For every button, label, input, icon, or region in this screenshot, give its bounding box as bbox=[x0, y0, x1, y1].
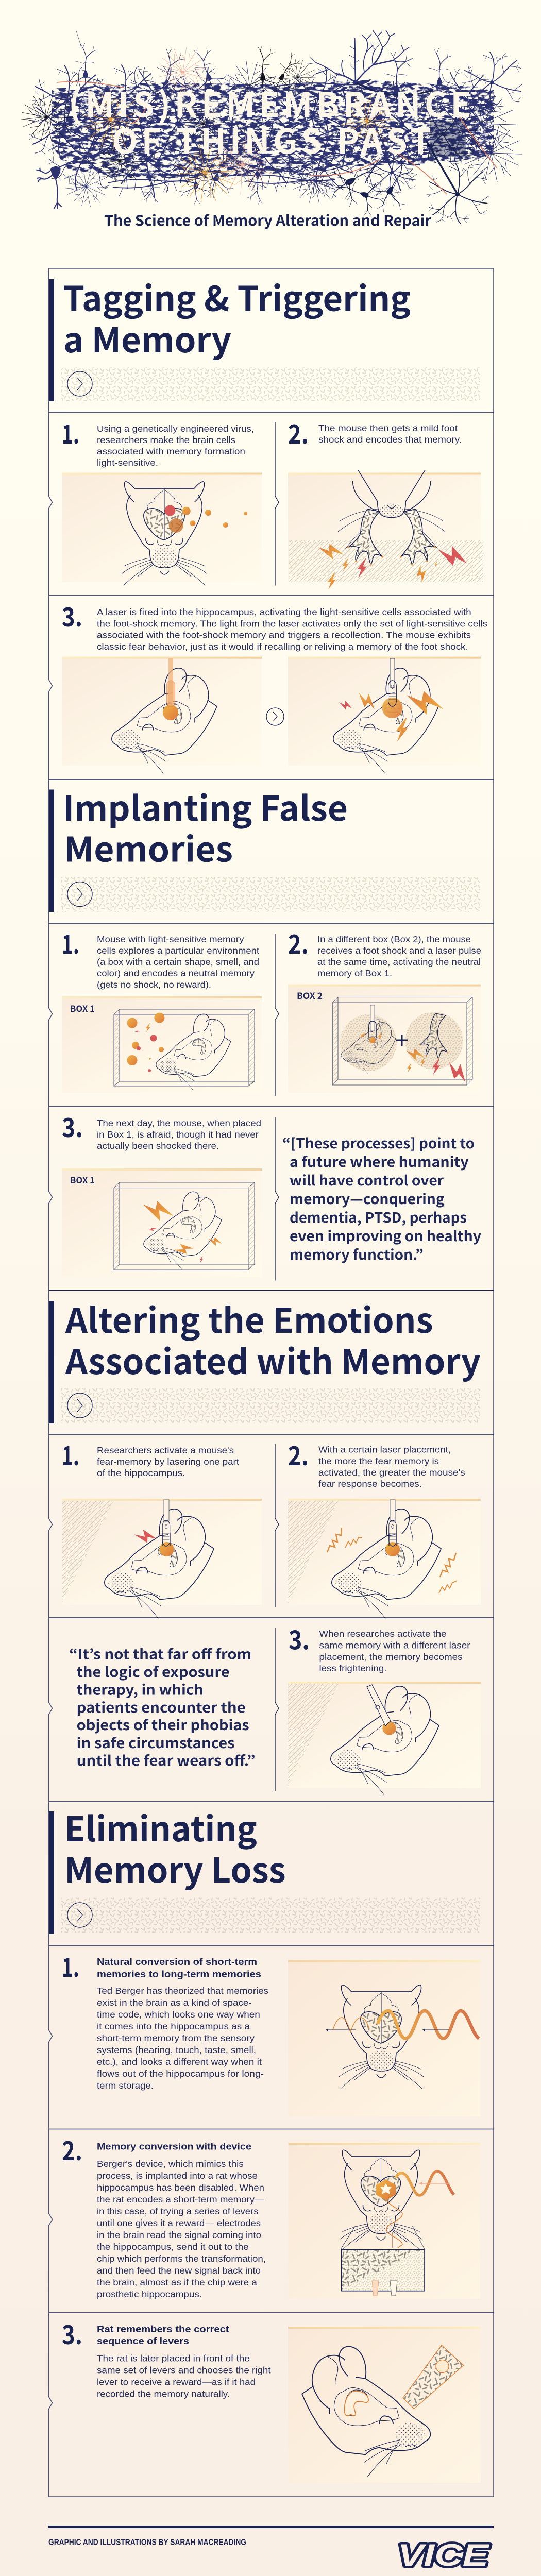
number: 3. bbox=[62, 1107, 83, 1145]
illustration: mouse feet shocked bbox=[288, 470, 483, 589]
box label: BOX 1 bbox=[70, 1173, 95, 1186]
section bar bbox=[49, 1301, 54, 1423]
illustration: rat with memory signal bbox=[288, 2327, 481, 2483]
patterned band with arrow bbox=[61, 367, 480, 401]
step heading bbox=[97, 2324, 229, 2346]
section heading: Memory Loss bbox=[64, 1843, 286, 1893]
step 3 bbox=[62, 2314, 481, 2483]
step text bbox=[97, 2353, 271, 2399]
patterned band with arrow bbox=[61, 877, 480, 912]
section heading: Altering the Emotions bbox=[65, 1294, 433, 1343]
pull quote: memory—conquering bbox=[290, 1188, 445, 1208]
section: implanting false memories bbox=[49, 782, 482, 1277]
step text: With a certain laser placement, bbox=[318, 1445, 451, 1455]
section bar bbox=[49, 1811, 54, 1934]
illustration: mouse head with tagged cells bbox=[62, 473, 262, 585]
pull quote: “It’s not that far off from bbox=[69, 1643, 251, 1664]
step heading: Memory conversion with device bbox=[97, 2141, 251, 2152]
illustration: box 1 fear bbox=[62, 1168, 262, 1277]
pull quote: memory function.” bbox=[290, 1244, 424, 1264]
step text: light-sensitive. bbox=[97, 457, 158, 468]
number: 3. bbox=[62, 596, 82, 634]
step text bbox=[318, 423, 462, 445]
step 1 bbox=[62, 413, 262, 585]
illustration: mouse fear response bbox=[288, 657, 481, 773]
step 2 bbox=[288, 923, 481, 1093]
number: 2. bbox=[62, 2130, 82, 2168]
step 3 bbox=[62, 596, 487, 773]
step text: A laser is fired into the hippocampus, activating the light-sensitive cells associated with bbox=[97, 607, 471, 617]
pull quote: “[These processes] point to bbox=[282, 1132, 475, 1153]
pull quote: a future where humanity bbox=[290, 1151, 469, 1171]
step heading: memories to long-term memories bbox=[97, 1969, 261, 1979]
box label: BOX 1 bbox=[70, 1002, 95, 1014]
outer frame bbox=[48, 268, 494, 2497]
pull quote bbox=[282, 1132, 482, 1264]
step text: short-term memory from the sensory bbox=[97, 2033, 255, 2043]
illustration: laser at different placement bbox=[288, 1682, 481, 1794]
step text: color) and encodes a neutral memory bbox=[97, 968, 255, 978]
step text: it comes into the hippocampus as a bbox=[97, 2021, 250, 2031]
step 1 bbox=[62, 1946, 481, 2116]
step 1 bbox=[62, 923, 262, 1093]
step text: cells explores a particular environment bbox=[97, 945, 259, 956]
number: 1. bbox=[62, 923, 79, 961]
step 2 bbox=[62, 2130, 480, 2299]
subtitle: The Science of Memory Alteration and Repair bbox=[104, 210, 432, 230]
title bbox=[69, 78, 471, 164]
number: 2. bbox=[288, 923, 309, 961]
box label: BOX 2 bbox=[297, 989, 323, 1002]
number: 2. bbox=[288, 413, 309, 451]
step text: prosthetic hippocampus. bbox=[97, 2289, 202, 2299]
box with mouse and smell cues bbox=[114, 1009, 255, 1090]
illustration: prosthetic hippocampus chip bbox=[289, 2143, 480, 2299]
number: 1. bbox=[62, 1435, 79, 1473]
step text: in Box 1, is afraid, though it had never bbox=[97, 1129, 259, 1140]
number: 3. bbox=[62, 2314, 82, 2352]
section heading: Tagging & Triggering bbox=[63, 272, 411, 321]
step text: of the hippocampus. bbox=[97, 1468, 185, 1478]
illustration: greater fear response bbox=[288, 1499, 481, 1618]
step heading: Natural conversion of short-term bbox=[97, 1956, 257, 1967]
step text bbox=[97, 607, 487, 652]
step text: Berger's device, which mimics this bbox=[97, 2159, 244, 2169]
step text: In a different box (Box 2), the mouse bbox=[317, 934, 471, 944]
step text: process, is implanted into a rat whose bbox=[97, 2171, 258, 2181]
illustration: laser activates memory bbox=[62, 657, 262, 773]
step text: less frightening. bbox=[319, 1663, 386, 1673]
pull quote bbox=[69, 1643, 256, 1770]
step text: receives a foot shock and a laser pulse bbox=[317, 945, 481, 956]
section heading: Memories bbox=[64, 823, 233, 872]
step text: the foot-shock memory. The light from the laser activates only the set of light-sensitive cells bbox=[97, 618, 487, 629]
step text: associated with memory formation bbox=[97, 446, 245, 456]
step text: (gets no shock, no reward). bbox=[97, 979, 211, 990]
step text: exist in the brain as a kind of space- bbox=[97, 1997, 252, 2008]
step text: flows out of the hippocampus for long- bbox=[97, 2069, 264, 2079]
step text: in this case, of trying a series of levers bbox=[97, 2206, 259, 2216]
step text: When researches activate the bbox=[319, 1629, 446, 1639]
step text: the rat encodes a short-term memory— bbox=[97, 2194, 264, 2205]
step text: hippocampus has been disabled. When bbox=[97, 2182, 264, 2193]
section bar bbox=[49, 789, 54, 912]
step text: and then feed the new signal back into bbox=[97, 2265, 261, 2276]
step text: the hippocampus, send it out to the bbox=[97, 2242, 249, 2252]
pull quote: the logic of exposure bbox=[77, 1661, 230, 1681]
pull quote: until the fear wears off.” bbox=[77, 1750, 256, 1770]
step 2 bbox=[288, 1435, 481, 1618]
neuron illustration bbox=[21, 31, 522, 224]
title: (MIS)REMEMBRANCE bbox=[69, 78, 471, 127]
pull quote: objects of their phobias bbox=[77, 1714, 249, 1734]
section: tagging and triggering a memory bbox=[49, 272, 487, 773]
illustration: space-time code waves bbox=[288, 1960, 481, 2116]
step text: Using a genetically engineered virus, bbox=[97, 423, 254, 434]
logo: VICE bbox=[398, 2538, 489, 2572]
step text bbox=[319, 1629, 470, 1673]
step text: until one gives it a reward— electrodes bbox=[97, 2218, 261, 2228]
step text: Mouse with light-sensitive memory bbox=[97, 934, 244, 944]
step text: the more the fear memory is bbox=[318, 1456, 439, 1466]
section: eliminating memory loss bbox=[49, 1802, 481, 2483]
patterned band with arrow bbox=[61, 1898, 480, 1933]
step text: Researchers activate a mouse's bbox=[97, 1445, 234, 1455]
step text: time code, which looks one way when bbox=[97, 2009, 260, 2020]
step 2 bbox=[288, 413, 483, 589]
step text: fear-memory by lasering one part bbox=[97, 1456, 239, 1467]
step text bbox=[97, 2159, 266, 2299]
step text: chip which performs the transformation, bbox=[97, 2253, 266, 2264]
section heading: a Memory bbox=[63, 313, 231, 363]
section heading: Eliminating bbox=[64, 1802, 257, 1852]
box with afraid mouse bbox=[114, 1182, 255, 1270]
section heading: Associated with Memory bbox=[65, 1335, 481, 1384]
pull quote: will have control over bbox=[290, 1170, 444, 1190]
section: altering the emotions bbox=[49, 1294, 481, 1794]
step text: etc.), and looks a different way when it bbox=[97, 2057, 262, 2067]
illustration: laser on fear memory bbox=[62, 1499, 262, 1618]
step heading: Rat remembers the correct bbox=[97, 2324, 229, 2334]
section heading: Implanting False bbox=[63, 782, 348, 831]
step text bbox=[318, 1445, 465, 1489]
section bar bbox=[49, 279, 54, 401]
step text: placement, the memory becomes bbox=[319, 1652, 463, 1662]
pull quote: therapy, in which bbox=[77, 1679, 204, 1699]
step text: (a box with a certain shape, smell, and bbox=[97, 957, 259, 967]
step text bbox=[317, 934, 481, 978]
pull quote: dementia, PTSD, perhaps bbox=[290, 1207, 467, 1227]
step text bbox=[97, 1445, 239, 1478]
step text: the brain, almost as if the chip were a bbox=[97, 2277, 257, 2287]
step text bbox=[97, 934, 259, 990]
box with laser and foot shock bbox=[333, 997, 472, 1085]
pull quote: in safe circumstances bbox=[77, 1732, 235, 1752]
pull quote: patients encounter the bbox=[77, 1697, 246, 1717]
step text: classic fear behavior, just as it would if recalling or reliving a memory of the foot shock. bbox=[97, 641, 468, 652]
step text: same memory with a different laser bbox=[319, 1640, 470, 1651]
step text: Ted Berger has theorized that memories bbox=[97, 1986, 268, 1996]
step text: The rat is later placed in front of the bbox=[97, 2353, 250, 2364]
step text: same set of levers and chooses the right bbox=[97, 2365, 271, 2376]
step text: lever to receive a reward—as if it had bbox=[97, 2377, 256, 2387]
step 3 bbox=[288, 1619, 481, 1794]
step text: researchers make the brain cells bbox=[97, 435, 235, 445]
section heading bbox=[65, 1294, 481, 1384]
step text: shock and encodes that memory. bbox=[318, 434, 462, 445]
title: OF THINGS PAST bbox=[112, 114, 431, 164]
step text: at the same time, activating the neutral bbox=[317, 957, 481, 967]
step 3 bbox=[62, 1107, 262, 1277]
number: 2. bbox=[288, 1435, 309, 1473]
pull quote: even improving on healthy bbox=[290, 1225, 482, 1245]
footer rule bbox=[48, 2526, 494, 2528]
patterned band with arrow bbox=[61, 1388, 480, 1423]
credit: GRAPHIC AND ILLUSTRATIONS BY SARAH MACREADING bbox=[48, 2538, 246, 2547]
number: 3. bbox=[289, 1619, 310, 1657]
step text bbox=[97, 423, 254, 468]
step text: memory of Box 1. bbox=[317, 968, 392, 978]
step 1 bbox=[62, 1435, 262, 1618]
number: 1. bbox=[62, 1946, 79, 1985]
step text: associated with the foot-shock memory and triggers a recollection. The mouse exhibits bbox=[97, 630, 471, 640]
step text bbox=[97, 1986, 268, 2091]
step text bbox=[97, 1118, 261, 1151]
illustration: box 1 bbox=[62, 996, 262, 1093]
step heading: sequence of levers bbox=[97, 2335, 189, 2346]
section heading bbox=[63, 782, 348, 872]
step text: fear response becomes. bbox=[318, 1479, 422, 1489]
step text: recorded the memory naturally. bbox=[97, 2389, 230, 2399]
step text: activated, the greater the mouse's bbox=[318, 1467, 465, 1478]
step text: in the brain read the signal coming into bbox=[97, 2230, 261, 2240]
step text: term storage. bbox=[97, 2080, 154, 2091]
step text: systems (hearing, touch, taste, smell, bbox=[97, 2045, 256, 2055]
arrow bbox=[266, 708, 284, 725]
step text: actually been shocked there. bbox=[97, 1141, 219, 1151]
section heading bbox=[64, 1802, 286, 1893]
step text: The next day, the mouse, when placed bbox=[97, 1118, 261, 1128]
step heading bbox=[97, 1956, 261, 1979]
section heading bbox=[63, 272, 411, 363]
number: 1. bbox=[62, 413, 79, 451]
illustration: box 2 bbox=[288, 985, 481, 1093]
step text: The mouse then gets a mild foot bbox=[318, 423, 458, 433]
